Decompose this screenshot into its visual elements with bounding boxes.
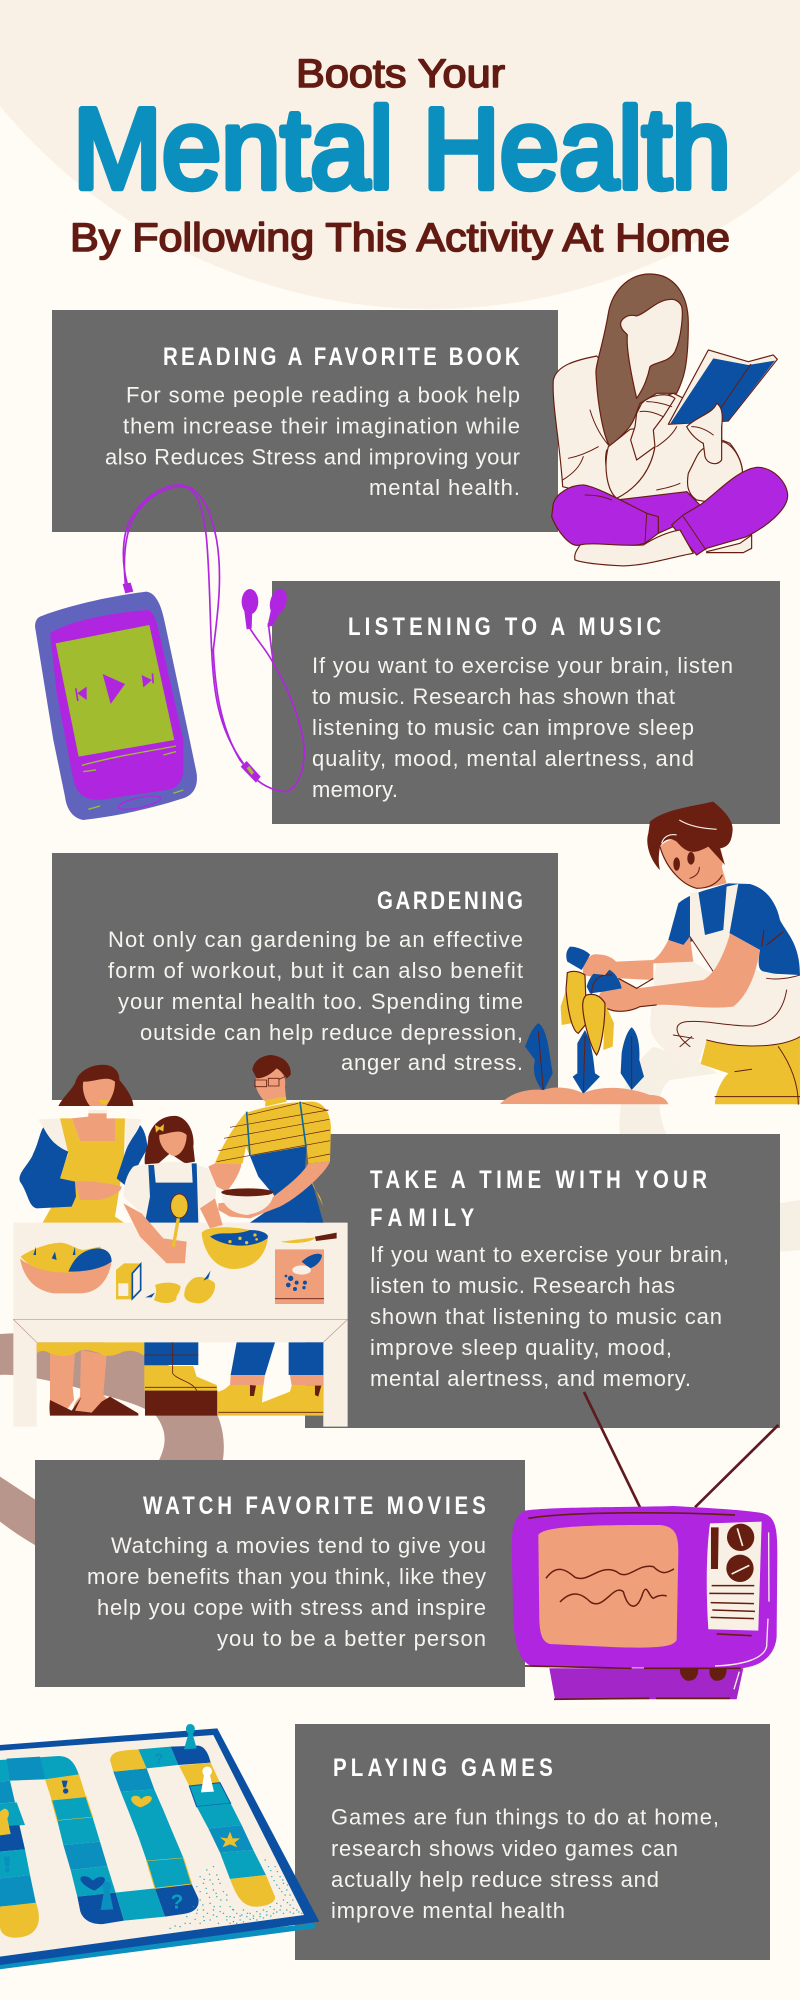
body text: reading: also Reduces Stress and improving your: [105, 444, 520, 470]
body text: music: [312, 653, 733, 802]
hands over carrots: [590, 955, 616, 975]
tv screen: [538, 1525, 678, 1648]
body text: movies: Watching a movies tend to give you: [111, 1533, 486, 1558]
body text: family: mental alertness, and memory.: [370, 1366, 691, 1391]
body text: movies: more benefits than you think, like they: [87, 1564, 486, 1589]
icon: woman reading a book: [552, 274, 788, 566]
body text: games: improve mental health: [331, 1898, 565, 1923]
background beige curve: [619, 1047, 800, 1252]
panel: take a time with your family: [305, 1134, 780, 1428]
board symbols: [4, 1751, 240, 1913]
tv stand: [549, 1668, 743, 1699]
control panel: [707, 1522, 762, 1631]
inline remote: [241, 761, 261, 783]
icon: family cooking together: [13, 1055, 348, 1427]
phone body: [35, 592, 197, 820]
board symbols: ?: [154, 1751, 163, 1767]
title line: Boots Your: Boots Your: [296, 52, 505, 96]
icon: music player with earphones: [35, 485, 304, 820]
icon: man harvesting carrots: [500, 802, 800, 1104]
heading: gardening: GARDENING: [377, 886, 523, 914]
body text: reading: [105, 382, 520, 500]
body text: music: to music. Research has shown that: [312, 684, 675, 709]
body text: family: If you want to exercise your brain,: [370, 1242, 729, 1267]
girl: [123, 1116, 223, 1263]
body text: movies: you to be a better person: [217, 1626, 486, 1651]
heading: games: PLAYING GAMES: [333, 1753, 553, 1781]
leaves in soil: [525, 947, 644, 1094]
table: [13, 1223, 348, 1427]
shirt: [668, 883, 800, 975]
body text: reading: For some people reading a book help: [126, 382, 520, 408]
body text: music: If you want to exercise your brain, listen: [312, 653, 733, 678]
body text: family: [370, 1242, 729, 1391]
pawns: [0, 1724, 214, 1910]
icon: board game: [0, 1724, 319, 1969]
panel: watch favorite movies: [35, 1460, 525, 1687]
mixing bowl: [202, 1227, 268, 1269]
legs under table: [37, 1342, 323, 1416]
body text: music: quality, mood, mental alertness, and: [312, 746, 694, 771]
highlights: [715, 1532, 769, 1689]
track squares: [0, 1746, 275, 1938]
body text: music: memory.: [312, 777, 398, 802]
speckled wear: [170, 1860, 302, 1928]
body text: gardening: [108, 927, 523, 1075]
phone screen: [56, 625, 174, 757]
body text: reading: mental health.: [369, 475, 520, 500]
heading: family: FAMILY: [370, 1203, 474, 1231]
arms: [583, 937, 693, 980]
title line: Mental Health: Mental Health: [73, 86, 731, 213]
icon: retro television: [512, 1392, 778, 1699]
apron: [650, 884, 800, 1067]
earphone cable: [123, 485, 304, 792]
earbuds: [242, 587, 290, 629]
juice box: [116, 1263, 141, 1299]
heading: music: LISTENING TO A MUSIC: [348, 612, 661, 640]
antennas: [584, 1392, 778, 1507]
food on table: [20, 1227, 337, 1304]
body text: family: listen to music. Research has: [370, 1273, 675, 1298]
heading: reading: READING A FAVORITE BOOK: [163, 342, 520, 370]
heading: family: TAKE A TIME WITH YOUR: [370, 1165, 707, 1193]
body text: games: research shows video games can: [331, 1836, 678, 1861]
body text: games: actually help reduce stress and: [331, 1867, 659, 1892]
body text: games: [331, 1804, 719, 1923]
mother: [19, 1065, 147, 1223]
panel: listening to a music: [272, 581, 780, 824]
apples: [154, 1283, 181, 1303]
trousers: [701, 1037, 800, 1104]
title: [70, 52, 731, 260]
body text: games: Games are fun things to do at home,: [331, 1804, 719, 1830]
panel: playing games: [295, 1724, 770, 1960]
body text: reading: them increase their imagination while: [123, 414, 520, 438]
fruit bowl: [20, 1258, 112, 1293]
knife: [281, 1237, 315, 1243]
panel: reading a favorite book: [52, 310, 558, 532]
recipe card: [275, 1249, 324, 1304]
body text: family: improve sleep quality, mood,: [370, 1335, 672, 1360]
carrots: [561, 971, 614, 1055]
body text: gardening: form of workout, but it can also benefit: [108, 958, 523, 983]
body text: gardening: your mental health too. Spending time: [118, 989, 523, 1014]
title line: By Following This Activity At Home: By Following This Activity At Home: [70, 216, 730, 260]
board symbols: ?: [171, 1890, 183, 1913]
body text: gardening: Not only can gardening be an effective: [108, 927, 523, 952]
heading: movies: WATCH FAVORITE MOVIES: [143, 1491, 486, 1519]
body text: movies: [87, 1533, 486, 1651]
father: [208, 1055, 331, 1223]
tv body: [512, 1506, 777, 1668]
body text: family: shown that listening to music can: [370, 1304, 722, 1329]
background brown curve: [0, 1333, 224, 1546]
panel: gardening: [52, 853, 558, 1100]
body text: movies: help you cope with stress and inspire: [97, 1595, 486, 1620]
soil mound: [500, 1087, 668, 1104]
body text: gardening: anger and stress.: [341, 1050, 523, 1075]
body text: music: listening to music can improve sleep: [312, 715, 694, 740]
body text: gardening: outside can help reduce depression,: [140, 1020, 523, 1045]
heading: family: [370, 1165, 707, 1231]
head: [660, 840, 727, 889]
background arch behind title: [0, 0, 800, 309]
player controls: [75, 673, 154, 704]
